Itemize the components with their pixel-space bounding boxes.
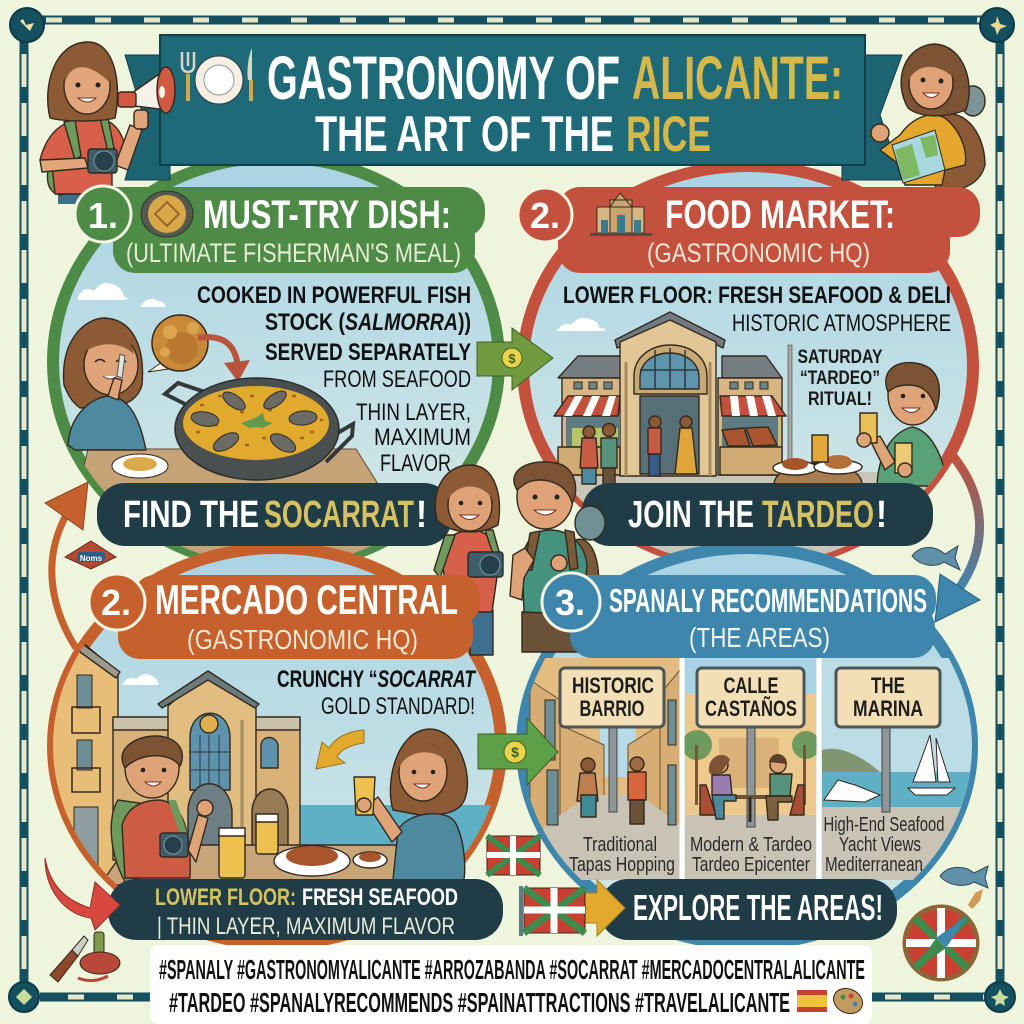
text block: market details: HISTORIC ATMOSPHERE	[732, 310, 951, 337]
woman with beer	[354, 729, 468, 880]
header: food market: (GASTRONOMIC HQ)	[647, 238, 870, 268]
arrow: money arrow bottom: $	[511, 744, 519, 760]
icon: gold arrow to explore	[584, 880, 625, 936]
call to action: explore	[600, 879, 897, 940]
sign: historic barrio: BARRIO	[580, 696, 644, 721]
panel: food market	[523, 166, 973, 572]
header: dish: 1.	[88, 195, 118, 236]
tardeo signpost and tapas table	[773, 345, 862, 495]
icon: spanish flag	[797, 990, 827, 1012]
sign: the marina	[836, 668, 940, 727]
captions: areas: Tapas Hopping	[569, 854, 675, 876]
text block: socarrat gold standard: CRUNCHY “SOCARRAT	[277, 666, 477, 693]
icon: fish bottom	[940, 866, 988, 888]
character: woman with megaphone	[40, 42, 175, 204]
header: spanaly recommendations: 3.	[555, 582, 585, 623]
header: spanaly recommendations	[542, 573, 936, 658]
icon: socarrat close-up	[148, 315, 250, 382]
badge 2 orange	[89, 574, 145, 630]
man with camera	[111, 736, 213, 882]
clouds	[78, 283, 166, 307]
woman tasting rice	[64, 318, 146, 450]
call to action: socarrat	[97, 483, 452, 546]
text block: dish details: COOKED IN POWERFUL FISH	[197, 282, 471, 309]
text block: dish details: FROM SEAFOOD	[323, 366, 471, 393]
white panel dividers	[682, 658, 819, 880]
panel: must-try dish	[53, 157, 499, 570]
panel: spanaly recommendations	[522, 548, 977, 944]
cloud	[557, 318, 605, 331]
text block: dish details: STOCK (SALMORRA))	[265, 309, 471, 336]
arrow: red curved	[45, 858, 120, 930]
badge 3	[542, 573, 600, 631]
call to action: tardeo: TARDEO	[762, 494, 874, 536]
badge 1	[75, 186, 131, 242]
header: food market: 2.	[530, 195, 560, 236]
icon: diamond sign: Noms	[80, 554, 103, 563]
text block: tardeo ritual	[798, 347, 883, 410]
icon: plate and cutlery	[182, 48, 253, 104]
text block: dish details: THIN LAYER,	[356, 399, 471, 426]
character: woman with map	[871, 44, 985, 192]
sign: calle castanos: CALLE	[724, 673, 778, 698]
text block: tardeo ritual: RITUAL!	[808, 389, 872, 410]
text block: market details	[563, 282, 951, 337]
captions: areas: Modern & Tardeo	[690, 834, 812, 856]
sign: calle castanos: CASTAÑOS	[705, 696, 797, 721]
call to action: tardeo	[582, 483, 933, 546]
header: dish	[75, 186, 485, 273]
call to action: socarrat: SOCARRAT	[264, 494, 414, 536]
market building	[554, 312, 786, 476]
captions: areas: Tardeo Epicenter	[692, 854, 810, 876]
area: historic barrio	[530, 658, 680, 880]
captions: areas: High-End Seafood	[824, 814, 944, 836]
arrow: money arrow top	[477, 328, 553, 390]
header: spanaly recommendations: (THE AREAS)	[689, 622, 830, 653]
icon: market building	[590, 193, 652, 236]
badge 2	[518, 188, 572, 242]
header: mercado central: 2.	[101, 582, 131, 623]
captions: areas	[569, 814, 944, 876]
call to action: socarrat: !	[416, 494, 427, 536]
call to action: explore: EXPLORE THE AREAS!	[633, 887, 883, 928]
captions: areas: Yacht Views	[839, 834, 921, 856]
sign: historic barrio: HISTORIC	[572, 673, 654, 698]
cafe table	[106, 844, 396, 886]
header: mercado central	[89, 574, 480, 659]
call to action: tardeo: JOIN THE	[628, 494, 754, 536]
icon: fish top	[912, 546, 960, 570]
header: dish: MUST-TRY DISH:	[203, 193, 451, 237]
call to action: socarrat: FIND THE	[123, 494, 259, 536]
man with beers	[857, 363, 947, 486]
table	[84, 448, 378, 554]
icon: kitchen tools	[50, 932, 120, 982]
arrow: orange loop	[45, 482, 88, 648]
plate of rice	[112, 454, 168, 478]
title line 2: RICE	[626, 106, 711, 162]
beer glasses and tapas plates	[219, 814, 387, 878]
apartment building	[50, 640, 120, 890]
icon: map	[892, 130, 945, 183]
sign: the marina: THE	[871, 673, 905, 698]
paella pan	[165, 378, 353, 480]
callout: lower floor: LOWER FLOOR:	[155, 884, 296, 911]
callout: lower floor	[108, 879, 503, 940]
text block: dish details	[197, 282, 471, 477]
panel: mercado central	[50, 548, 506, 944]
icon: golden arrow	[316, 730, 364, 769]
text block: dish details: FLAVOR	[380, 450, 451, 477]
icon: diamond sign	[65, 541, 116, 569]
arrow: money arrow bottom	[478, 718, 558, 785]
title line 1: ALICANTE:	[632, 44, 843, 112]
captions: areas: Traditional	[583, 834, 657, 856]
text block: dish details: MAXIMUM	[374, 424, 471, 451]
icon: basque flag large	[519, 886, 585, 936]
header: mercado central: (GASTRONOMIC HQ)	[187, 624, 418, 655]
character: man with backpack	[510, 462, 605, 652]
title line 2: THE ART OF THE	[315, 106, 614, 162]
icon: palette	[829, 984, 867, 1018]
area: calle castanos	[682, 658, 820, 880]
callout: lower floor: | THIN LAYER, MAXIMUM FLAVOR	[157, 913, 455, 940]
title banner	[125, 35, 902, 180]
header: food market	[518, 187, 980, 273]
cloud	[122, 674, 159, 685]
callout: lower floor: FRESH SEAFOOD	[302, 884, 458, 911]
header: dish: (ULTIMATE FISHERMAN'S MEAL)	[126, 238, 461, 268]
header: food market: FOOD MARKET:	[665, 193, 895, 237]
header: mercado central: MERCADO CENTRAL	[155, 576, 458, 623]
arrow: money arrow top: $	[508, 351, 516, 366]
call to action: tardeo: !	[876, 494, 887, 536]
arrow: red to blue	[935, 455, 980, 622]
mercado building	[113, 671, 300, 875]
text block: socarrat gold standard	[277, 666, 477, 720]
icon: megaphone	[118, 67, 175, 129]
captions: areas: Mediterranean	[825, 854, 923, 876]
area: the marina	[822, 658, 977, 880]
character: woman with camera	[434, 465, 503, 655]
text block: dish details: SERVED SEPARATELY	[265, 339, 471, 366]
icon: basque flag small	[487, 836, 540, 875]
sign: the marina: MARINA	[853, 696, 923, 721]
sea	[296, 805, 506, 853]
title line 1: GASTRONOMY OF	[267, 44, 620, 112]
icon: compass	[905, 889, 983, 979]
text block: tardeo ritual: “TARDEO”	[800, 368, 880, 389]
text block: tardeo ritual: SATURDAY	[798, 347, 883, 368]
sign: historic barrio	[560, 668, 664, 727]
sign: calle castanos	[697, 668, 804, 727]
hashtag block	[150, 945, 872, 1024]
text block: socarrat gold standard: GOLD STANDARD!	[321, 693, 475, 720]
icon: paella pan	[141, 191, 193, 237]
market visitors	[580, 416, 697, 488]
